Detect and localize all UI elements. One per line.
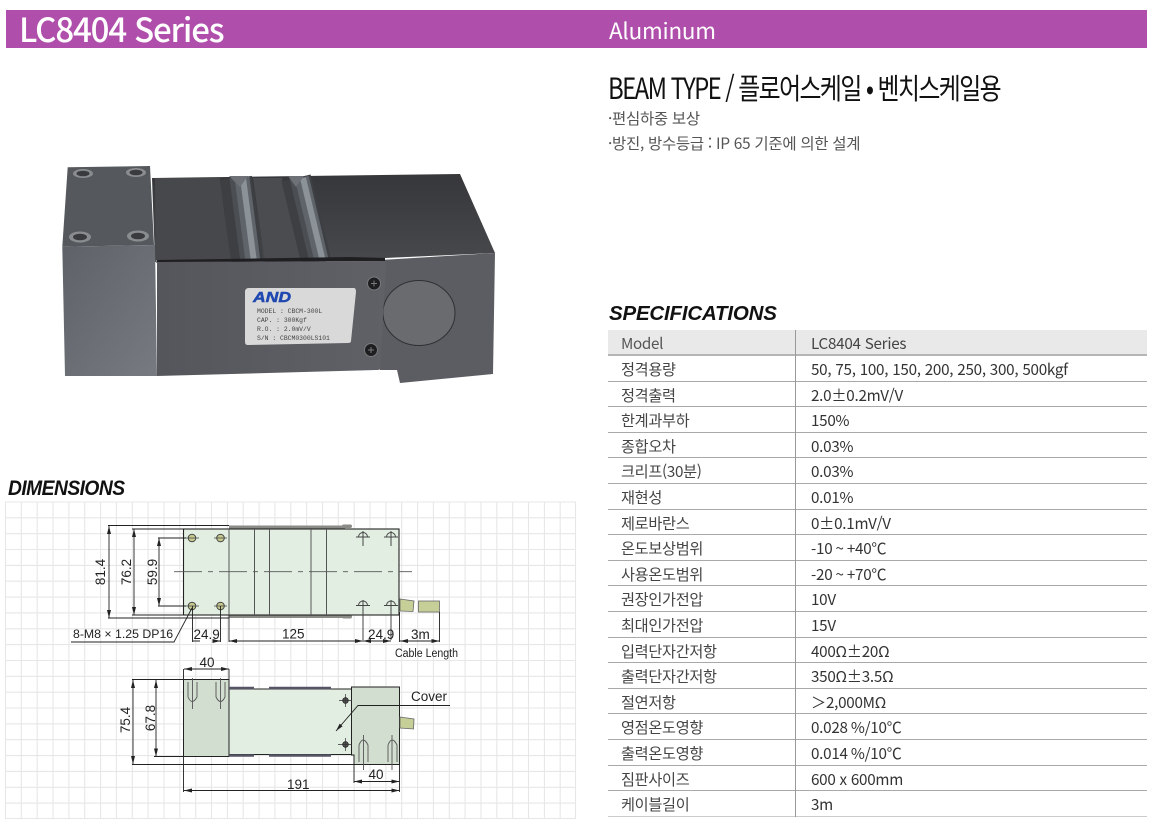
row: overload: 150% (811, 409, 849, 431)
row: zero temperature effect: 영점온도영향 (621, 716, 703, 738)
side view dimensions (132, 669, 450, 792)
side view labels (118, 655, 448, 792)
row: creep: 크리프(30분) (621, 460, 702, 482)
row: combined error: 종합오차 (621, 435, 676, 457)
row: insulation resistance (608, 689, 1147, 714)
feature: waterproof rating: ·방진, 방수등급 : IP 65 기준에 의한 설계 (608, 132, 860, 154)
row: insulation resistance: 절연저항 (621, 691, 676, 713)
row: capacity (608, 356, 1147, 382)
row: zero balance: 0±0.1mV/V (811, 512, 891, 534)
row: capacity: 정격용량 (621, 358, 676, 380)
row: cable length: 케이블길이 (621, 793, 689, 815)
row: compensated temperature range: 온도보상범위 (621, 537, 703, 559)
nameplate: MODEL : CBCM-300L (257, 308, 322, 315)
row: compensated temperature range (608, 535, 1147, 561)
feature list (608, 107, 860, 154)
row: zero balance: 제로바란스 (621, 512, 689, 534)
plan body (184, 529, 399, 615)
row: recommended excitation: 권장인가전압 (621, 588, 703, 610)
row: maximum excitation: 15V (811, 614, 836, 636)
side view labels: 67.8 (143, 705, 158, 731)
row: platform size (608, 766, 1147, 791)
rails (229, 526, 345, 528)
side cable (400, 717, 414, 729)
heading: dimensions: DIMENSIONS (8, 476, 125, 500)
plan view labels: 24.9 (194, 627, 220, 642)
row: cable length: 3m (811, 793, 833, 815)
row: output resistance: 출력단자간저항 (621, 665, 717, 687)
centre line (174, 571, 412, 573)
nameplate: CAP. : 300Kgf (257, 317, 307, 324)
plan view labels: 3m (411, 627, 430, 642)
row: rated output: 정격출력 (621, 384, 676, 406)
title: series name: LC8404 Series (19, 4, 223, 52)
row: operating temperature range (608, 561, 1147, 586)
nameplate (245, 288, 356, 345)
column divider (795, 330, 796, 817)
row: maximum excitation: 최대인가전압 (621, 614, 703, 636)
row: zero temperature effect: 0.028 %/10℃ (811, 716, 902, 738)
groove 2 tube (292, 178, 323, 262)
side view (184, 678, 414, 770)
mounting holes left (188, 534, 224, 610)
plan view labels: Cable Length (395, 648, 458, 660)
product photo: load cell (62, 166, 495, 383)
row: maximum excitation (608, 612, 1147, 638)
table header row (608, 330, 1147, 356)
row: platform size: 600 x 600mm (811, 768, 903, 790)
nameplate: R.O. : 2.0mV/V (257, 326, 311, 333)
side centre body (229, 689, 352, 754)
specifications table (608, 330, 1147, 817)
heading: specifications: SPECIFICATIONS (609, 302, 777, 325)
row: compensated temperature range: -10 ~ +40℃ (811, 537, 886, 559)
cable stub (400, 599, 414, 612)
side view labels: 40 (200, 655, 215, 670)
row: rated output (608, 382, 1147, 407)
table header row: LC8404 Series (811, 332, 906, 354)
row: cable length (608, 791, 1147, 817)
header bar (6, 10, 1147, 48)
plan view labels: 8-M8 × 1.25 DP16 (73, 627, 173, 641)
row: repeatability: 재현성 (621, 486, 662, 508)
plan view labels: 125 (282, 626, 305, 642)
cover screws (364, 277, 380, 356)
row: operating temperature range: 사용온도범위 (621, 563, 703, 585)
row: output resistance: 350Ω±3.5Ω (811, 665, 893, 687)
upper deck (152, 174, 495, 262)
plan view labels: 24.9 (368, 627, 394, 642)
table header row: Model (621, 332, 663, 354)
row: rated output: 2.0±0.2mV/V (811, 384, 903, 406)
feature: eccentric load: ·편심하중 보상 (608, 107, 700, 129)
connector disc (383, 280, 455, 346)
heading: beam type: BEAM TYPE / 플로어스케일 • 벤치스케일용 (608, 66, 1000, 108)
row: combined error: 0.03% (811, 435, 853, 457)
side view labels: 40 (368, 767, 384, 782)
row: repeatability: 0.01% (811, 486, 853, 508)
plan view (174, 524, 440, 640)
row: overload: 한계과부하 (621, 409, 689, 431)
row: zero balance (608, 510, 1147, 535)
row: recommended excitation: 10V (811, 588, 836, 610)
side left block (184, 680, 229, 756)
side right block (352, 687, 400, 764)
row: output resistance (608, 663, 1147, 689)
side view labels: Cover (411, 689, 448, 704)
row: insulation resistance: ＞2,000MΩ (811, 691, 886, 713)
row: overload (608, 407, 1147, 433)
blind holes (188, 678, 397, 770)
row: combined error (608, 433, 1147, 458)
side view labels: 191 (287, 777, 310, 792)
cover plate (157, 261, 386, 376)
row: input resistance: 400Ω±20Ω (811, 640, 889, 662)
mounting holes right (356, 531, 398, 640)
row: output temperature effect: 출력온도영향 (621, 742, 703, 764)
side view labels: 75.4 (118, 706, 133, 733)
row: input resistance: 입력단자간저항 (621, 640, 717, 662)
row: creep (608, 458, 1147, 484)
right end (380, 253, 495, 383)
plan view labels: 76.2 (119, 559, 134, 585)
plan view labels: 81.4 (93, 558, 108, 585)
row: recommended excitation (608, 586, 1147, 612)
row: operating temperature range: -20 ~ +70℃ (811, 563, 886, 585)
row: platform size: 짐판사이즈 (621, 768, 689, 790)
threaded holes (69, 168, 149, 242)
row: output temperature effect (608, 740, 1147, 766)
plan view labels: 59.9 (145, 559, 160, 585)
left block front (62, 245, 157, 376)
row: capacity: 50, 75, 100, 150, 200, 250, 300, 500kgf (811, 358, 1068, 380)
row: zero temperature effect (608, 714, 1147, 740)
row: creep: 0.03% (811, 460, 853, 482)
row: output temperature effect: 0.014 %/10℃ (811, 742, 902, 764)
maker logo: AND (252, 289, 291, 306)
groove 1 tube (232, 178, 254, 262)
cover screws (343, 698, 348, 747)
graph paper grid (5, 502, 576, 818)
left block top (62, 166, 154, 247)
row: repeatability (608, 484, 1147, 510)
plan view labels (73, 558, 458, 660)
nameplate: S/N : CBCM0300LS101 (257, 335, 330, 342)
material label: Aluminum (609, 14, 716, 46)
row: input resistance (608, 638, 1147, 663)
plan view dimensions (71, 526, 440, 642)
dimensions drawing (5, 502, 576, 819)
